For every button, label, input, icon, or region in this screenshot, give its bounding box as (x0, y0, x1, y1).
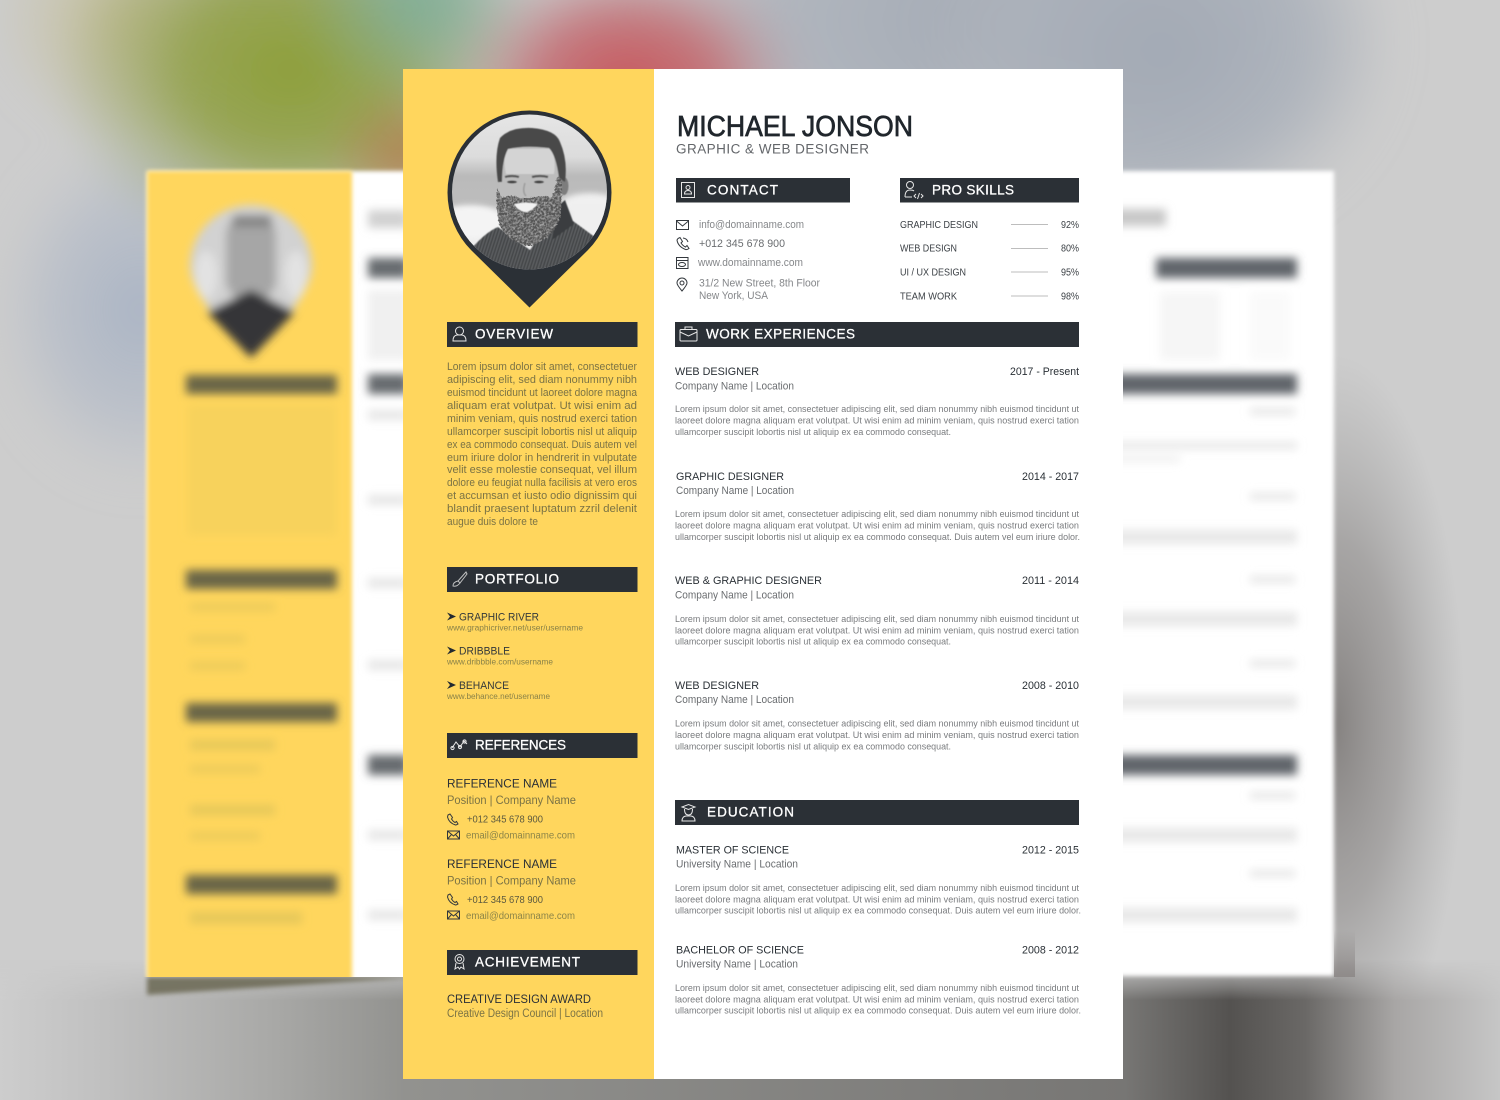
overview paragraph: velit esse molestie consequat, vel illum (447, 464, 637, 476)
job: web and graphic designer: WEB & GRAPHIC DESIGNER (675, 575, 822, 587)
overview paragraph: dolore eu feugiat nulla facilisis at vero eros (447, 477, 637, 489)
education: master of science: laoreet dolore magna aliquam erat volutpat. Ut wisi enim ad minim veniam, quis nostrud exerci tation (675, 894, 1079, 906)
overview paragraph (447, 361, 638, 528)
job: web designer 2008: WEB DESIGNER (675, 680, 759, 692)
icon: person with code (905, 182, 923, 199)
education: master of science: MASTER OF SCIENCE (676, 844, 789, 856)
job: web designer 2017: laoreet dolore magna aliquam erat volutpat. Ut wisi enim ad minim veniam, quis nostrud exerci tation (675, 416, 1079, 426)
job: graphic designer: GRAPHIC DESIGNER (676, 471, 784, 483)
contact details: www.domainname.com (697, 257, 803, 269)
reference two (447, 857, 576, 922)
skills list: 98% (1061, 292, 1079, 302)
icon: location pin (677, 278, 687, 291)
reference two: REFERENCE NAME (447, 857, 557, 871)
title block (676, 111, 913, 156)
reference two: email@domainname.com (466, 911, 575, 922)
heading: portfolio (447, 567, 638, 592)
skills list: GRAPHIC DESIGN (900, 220, 978, 231)
icon: graduate (682, 804, 695, 821)
heading: contact (676, 178, 850, 202)
job: graphic designer (675, 471, 1080, 543)
reference two: +012 345 678 900 (467, 895, 543, 906)
job: graphic designer: laoreet dolore magna aliquam erat volutpat. Ut wisi enim ad minim veniam, quis nostrud exerci tation (675, 520, 1079, 532)
job: web designer 2017: Lorem ipsum dolor sit amet, consectetuer adipiscing elit, sed diam nonummy nibh euismod tincidunt ut (675, 404, 1079, 415)
heading: education (675, 800, 1079, 825)
portfolio links (446, 612, 584, 701)
portfolio links: BEHANCE (459, 680, 509, 692)
heading: overview: OVERVIEW (475, 326, 553, 342)
panel: yellow sidebar (403, 69, 654, 1079)
education: bachelor of science: laoreet dolore magna aliquam erat volutpat. Ut wisi enim ad minim veniam, quis nostrud exerci tation (675, 994, 1079, 1006)
job: graphic designer: Lorem ipsum dolor sit amet, consectetuer adipiscing elit, sed diam nonummy nibh euismod tincidunt ut (675, 509, 1079, 520)
icon: brush (453, 572, 467, 586)
heading: contact: CONTACT (707, 182, 778, 198)
heading: portfolio: PORTFOLIO (475, 572, 559, 586)
education: master of science: 2012 - 2015 (1022, 844, 1079, 856)
heading: overview (447, 322, 638, 347)
reference one: email@domainname.com (466, 830, 575, 842)
portfolio links: www.graphicriver.net/user/username (446, 624, 584, 632)
job: graphic designer: ullamcorper suscipit lobortis nisl ut aliquip ex ea commodo consequat. Duis autem vel eum iriure dolor. (675, 532, 1080, 543)
job: web and graphic designer (675, 575, 1079, 648)
job: web designer 2017: 2017 - Present (1010, 366, 1079, 378)
contact details: 31/2 New Street, 8th Floor (699, 278, 820, 290)
job: web designer 2008: 2008 - 2010 (1022, 680, 1079, 692)
job: web and graphic designer: Lorem ipsum dolor sit amet, consectetuer adipiscing elit, sed diam nonummy nibh euismod tincidunt ut (675, 614, 1079, 625)
overview paragraph: ex ea commodo consequat. Duis autem vel (447, 439, 637, 451)
title block: GRAPHIC & WEB DESIGNER (676, 142, 869, 156)
job: web designer 2008: laoreet dolore magna aliquam erat volutpat. Ut wisi enim ad minim veniam, quis nostrud exerci tation (675, 730, 1079, 741)
job: web designer 2008: Lorem ipsum dolor sit amet, consectetuer adipiscing elit, sed diam nonummy nibh euismod tincidunt ut (675, 718, 1079, 730)
overview paragraph: blandit praesent luptatum zzril delenit (447, 503, 637, 515)
reference one: REFERENCE NAME (447, 776, 557, 790)
job: web and graphic designer: 2011 - 2014 (1022, 575, 1079, 587)
skills list (900, 220, 1079, 302)
skills list: 95% (1061, 268, 1079, 278)
achievement item: CREATIVE DESIGN AWARD (447, 994, 591, 1006)
education: master of science: ullamcorper suscipit lobortis nisl ut aliquip ex ea commodo consequat. Duis autem vel eum iriure dolor. (675, 906, 1081, 916)
achievement item: Creative Design Council | Location (447, 1008, 603, 1020)
contact details: info@domainname.com (699, 219, 804, 231)
education: bachelor of science: ullamcorper suscipit lobortis nisl ut aliquip ex ea commodo consequat. Duis autem vel eum iriure dolor. (675, 1006, 1081, 1016)
portfolio links: www.behance.net/username (446, 692, 551, 701)
education: bachelor of science: University Name | Location (676, 958, 798, 970)
heading: achievement: ACHIEVEMENT (475, 954, 580, 970)
job: web designer 2017: ullamcorper suscipit lobortis nisl ut aliquip ex ea commodo consequat. (675, 427, 951, 438)
overview paragraph: augue duis dolore te (447, 516, 538, 528)
reference one: Position | Company Name (447, 793, 576, 807)
heading: achievement (447, 950, 638, 975)
icon: web window (676, 258, 688, 268)
reference one (447, 776, 576, 842)
heading: references: REFERENCES (475, 738, 566, 752)
achievement item (447, 994, 603, 1020)
title block: MICHAEL JONSON (677, 111, 913, 143)
overview paragraph: et accumsan et iusto odio dignissim qui (447, 490, 637, 502)
job: web and graphic designer: Company Name | Location (675, 590, 794, 602)
portfolio links: www.dribbble.com/username (446, 658, 554, 666)
skills list: 80% (1061, 244, 1079, 254)
icon: award ribbon (455, 954, 464, 969)
heading: work experiences (675, 322, 1079, 347)
reference one: +012 345 678 900 (467, 814, 543, 826)
photo of man (452, 114, 607, 270)
job: web designer 2008: Company Name | Location (675, 694, 794, 706)
icon: mail (676, 220, 688, 230)
job: graphic designer: Company Name | Location (676, 485, 794, 497)
contact details: New York, USA (699, 290, 769, 302)
overview paragraph: adipiscing elit, sed diam nonummy nibh (447, 374, 637, 386)
reference two: Position | Company Name (447, 874, 576, 888)
skills list: UI / UX DESIGN (900, 268, 966, 278)
heading: pro skills (900, 178, 1079, 202)
portrait pin (448, 110, 612, 308)
education: bachelor of science (675, 944, 1081, 1016)
job: web designer 2017 (675, 366, 1079, 438)
back page shadow wedge (147, 977, 420, 995)
icon: address book (682, 182, 694, 198)
icon: phone (677, 238, 689, 250)
heading: education: EDUCATION (707, 804, 794, 820)
heading: references (447, 733, 638, 758)
overview paragraph: aliquam erat volutpat. Ut wisi enim ad (447, 400, 637, 412)
portfolio links: GRAPHIC RIVER (459, 612, 539, 624)
job: web and graphic designer: laoreet dolore magna aliquam erat volutpat. Ut wisi enim ad minim veniam, quis nostrud exerci tation (675, 626, 1079, 636)
job: web designer 2017: WEB DESIGNER (675, 366, 759, 378)
job: web designer 2008 (675, 680, 1079, 752)
education: master of science: Lorem ipsum dolor sit amet, consectetuer adipiscing elit, sed diam nonummy nibh euismod tincidunt ut (675, 883, 1079, 894)
job: web and graphic designer: ullamcorper suscipit lobortis nisl ut aliquip ex ea commodo consequat. (675, 636, 951, 648)
overview paragraph: euismod tincidunt ut laoreet dolore magna (447, 387, 638, 399)
heading: work experiences: WORK EXPERIENCES (706, 326, 855, 342)
job: graphic designer: 2014 - 2017 (1022, 471, 1079, 483)
skills list: WEB DESIGN (900, 244, 957, 254)
education: master of science: University Name | Location (676, 858, 798, 870)
education: master of science (675, 844, 1081, 916)
overview paragraph: Lorem ipsum dolor sit amet, consectetuer (447, 361, 637, 373)
panel: white main page (403, 69, 1123, 1079)
contact details: +012 345 678 900 (699, 238, 785, 250)
overview paragraph: eum iriure dolor in hendrerit in vulputate (447, 452, 637, 464)
skills list: 92% (1061, 220, 1079, 231)
portfolio links: DRIBBBLE (459, 646, 510, 658)
education: bachelor of science: 2008 - 2012 (1022, 944, 1079, 956)
icon: briefcase (680, 327, 697, 341)
blurred back resume page (147, 171, 1355, 991)
overview paragraph: minim veniam, quis nostrud exerci tation (447, 413, 637, 425)
contact details (676, 219, 820, 302)
overview paragraph: ullamcorper suscipit lobortis nisl ut aliquip (447, 426, 637, 438)
job: web designer 2017: Company Name | Location (675, 380, 794, 392)
heading: pro skills: PRO SKILLS (932, 182, 1014, 198)
education: bachelor of science: Lorem ipsum dolor sit amet, consectetuer adipiscing elit, sed diam nonummy nibh euismod tincidunt ut (675, 983, 1079, 994)
education: bachelor of science: BACHELOR OF SCIENCE (676, 944, 804, 956)
icon: network nodes (451, 740, 467, 750)
icon: person (453, 327, 466, 341)
job: web designer 2008: ullamcorper suscipit lobortis nisl ut aliquip ex ea commodo consequat. (675, 742, 951, 752)
skills list: TEAM WORK (900, 292, 957, 302)
